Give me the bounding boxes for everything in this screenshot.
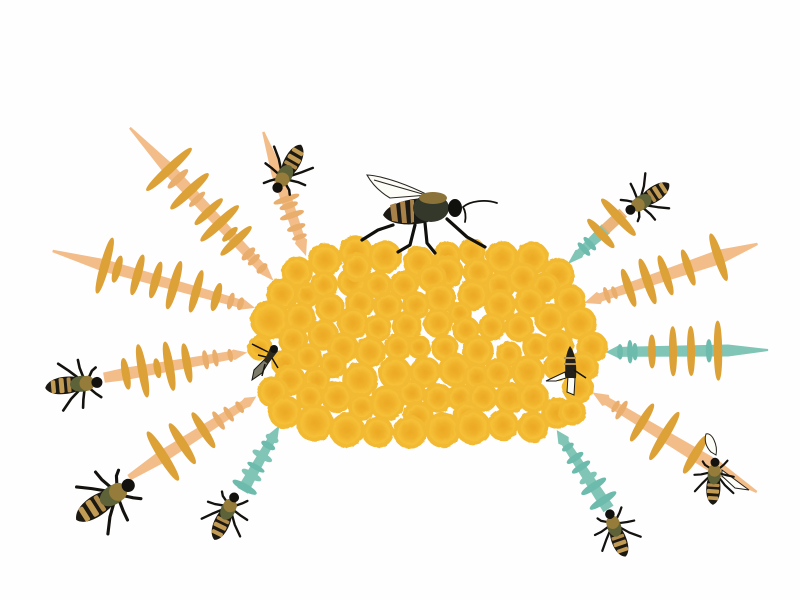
legs: [252, 344, 278, 376]
bars: top-right ray: [566, 197, 637, 268]
ray: lower-right peach: [581, 371, 771, 515]
bars: lower-left ray: [145, 382, 257, 482]
body: [264, 346, 278, 364]
bars: lower-right ray: [600, 382, 712, 480]
bars: bottom-right ray: [554, 437, 617, 511]
bee legs: [362, 219, 485, 253]
bars: upper-left ray: [145, 146, 286, 291]
bars: top ray: [273, 193, 312, 243]
bee: lower right with wings: [692, 434, 749, 506]
bee antennae: [463, 201, 497, 222]
ray: mid-left peach: [101, 327, 249, 403]
ray: lower-left peach: [115, 374, 269, 501]
bars: upper-right ray: [597, 233, 730, 319]
ray: top peach under bee: [251, 128, 317, 257]
bee stripes: [390, 200, 414, 223]
wing: [252, 358, 270, 380]
bee wing: [367, 175, 428, 198]
bee: bottom left small: [194, 484, 256, 549]
body: [565, 346, 576, 378]
bars: right ray: [617, 322, 722, 381]
ray: bottom-left teal: [232, 422, 289, 496]
wings: [546, 372, 575, 395]
bars: mid-left ray: [118, 329, 237, 400]
leg: [574, 370, 586, 378]
bars: left ray: [94, 238, 250, 331]
ray: upper-right peach: [579, 221, 765, 325]
bee head: [448, 199, 462, 217]
wings: [705, 434, 749, 490]
ray: right teal: [608, 321, 768, 381]
ray: bottom-right teal: [545, 424, 620, 516]
fly on comb right: [546, 346, 586, 395]
bars: bottom-left ray: [232, 430, 285, 496]
bee abdomen: [383, 198, 428, 224]
ray: upper-left long peach: [108, 107, 293, 299]
bee: left: [43, 358, 105, 412]
bee thorax: [413, 194, 449, 222]
large bee on top of comb: [362, 175, 497, 253]
ray: left peach: [45, 224, 260, 334]
bee: top left: [255, 134, 322, 203]
bee: bottom right small: [589, 503, 645, 564]
ray: top-right teal and gold: [554, 195, 639, 280]
bee: top right: [614, 165, 681, 231]
bee: lower left: [60, 458, 150, 544]
fly on comb left: [252, 344, 278, 380]
honeycomb cluster: [249, 237, 606, 447]
